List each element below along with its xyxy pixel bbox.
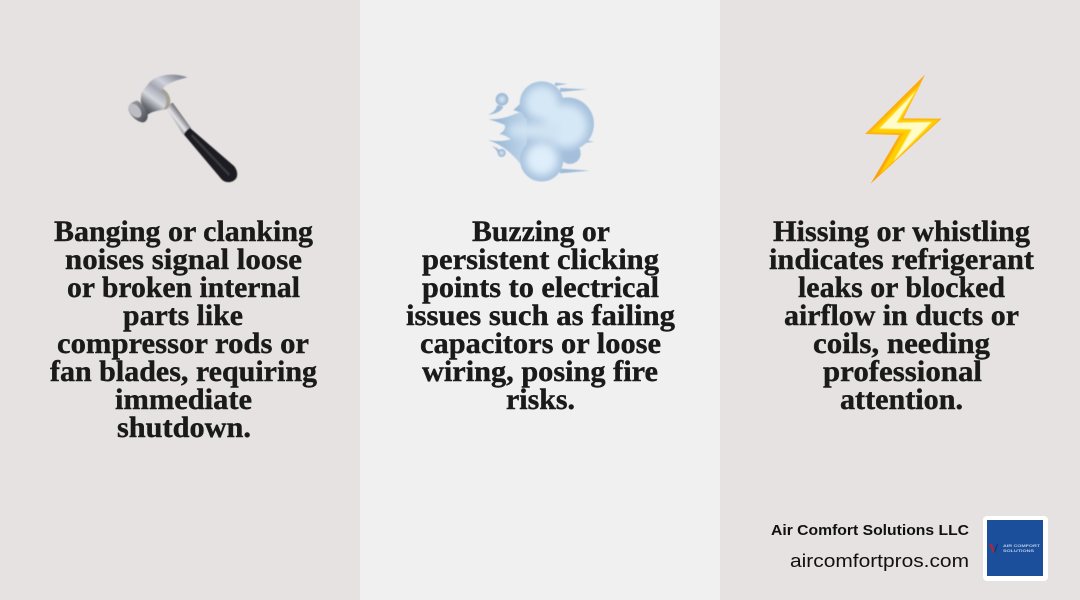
text: hissing description: airflow in ducts or: [784, 299, 1019, 332]
text: banging description: or broken internal: [67, 271, 300, 304]
logo: SOLUTIONS: [1003, 548, 1034, 553]
text: banging description: fan blades, requiring: [50, 355, 317, 388]
text: buzzing description: risks.: [506, 383, 575, 416]
text: buzzing description: [406, 215, 675, 416]
icon: dash cloud: [487, 81, 594, 182]
text: banging description: noises signal loose: [65, 243, 302, 276]
text: buzzing description: capacitors or loose: [420, 327, 661, 360]
panel: buzzing or clicking noises: [360, 0, 720, 600]
website: aircomfortpros.com: [790, 550, 969, 571]
logo: [983, 516, 1048, 581]
text: hissing description: coils, needing: [813, 327, 990, 360]
text: banging description: immediate: [115, 383, 252, 416]
text: buzzing description: wiring, posing fire: [422, 355, 658, 388]
text: buzzing description: Buzzing or: [472, 215, 610, 248]
text: banging description: parts like: [123, 299, 243, 332]
text: hissing description: attention.: [840, 383, 963, 416]
brand name: Air Comfort Solutions LLC: [771, 523, 970, 539]
text: buzzing description: points to electrical: [422, 271, 659, 304]
text: banging description: shutdown.: [117, 411, 251, 444]
icon: lightning bolt: [865, 75, 942, 184]
text: hissing description: Hissing or whistling: [773, 215, 1030, 248]
icon: hammer: [126, 75, 237, 182]
panel: banging or clanking noises: [0, 0, 360, 600]
logo: AIR COMFORT: [1003, 543, 1041, 548]
text: banging description: [50, 215, 317, 444]
text: hissing description: professional: [823, 355, 982, 388]
text: banging description: compressor rods or: [57, 327, 309, 360]
text: hissing description: indicates refrigerant: [769, 243, 1034, 276]
text: buzzing description: persistent clicking: [422, 243, 659, 276]
panel: hissing or whistling noises: [720, 0, 1080, 600]
text: banging description: Banging or clanking: [54, 215, 313, 248]
text: hissing description: [769, 215, 1034, 416]
text: hissing description: leaks or blocked: [798, 271, 1005, 304]
text: buzzing description: issues such as failing: [406, 299, 675, 332]
